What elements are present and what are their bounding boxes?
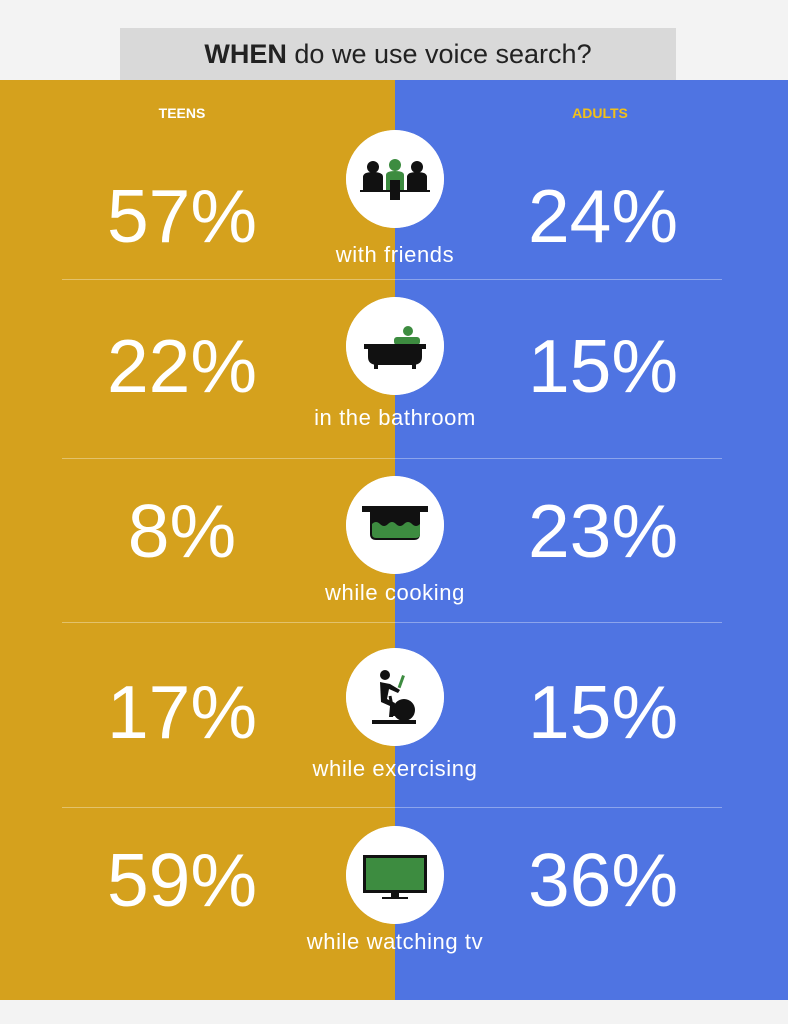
label: while exercising xyxy=(313,756,477,781)
teens value: 17% xyxy=(107,670,257,754)
adults value: 15% xyxy=(528,670,678,754)
row: in the bathroom xyxy=(107,297,678,430)
panel: teens xyxy=(0,80,395,1000)
icon: bathtub xyxy=(346,297,444,395)
icon: exercise bike xyxy=(346,648,444,746)
row: with friends xyxy=(107,130,678,267)
adults value: 36% xyxy=(528,838,678,922)
title xyxy=(120,28,676,80)
row: while cooking xyxy=(128,476,678,605)
label: while cooking xyxy=(325,580,465,605)
adults value: 23% xyxy=(528,489,678,573)
adults value: 24% xyxy=(528,174,678,258)
icon: pot xyxy=(346,476,444,574)
teens value: 8% xyxy=(128,489,236,573)
row: while exercising xyxy=(107,648,678,781)
icon: tv xyxy=(346,826,444,924)
label: in the bathroom xyxy=(314,405,476,430)
icon: friends xyxy=(346,130,444,228)
teens value: 22% xyxy=(107,324,257,408)
heading: adults: ADULTS xyxy=(572,105,628,121)
adults value: 15% xyxy=(528,324,678,408)
teens value: 57% xyxy=(107,174,257,258)
label: with friends xyxy=(336,242,454,267)
label: while watching tv xyxy=(307,929,483,954)
teens value: 59% xyxy=(107,838,257,922)
panel: adults xyxy=(395,80,788,1000)
title: WHEN do we use voice search? xyxy=(204,39,592,69)
row: while watching tv xyxy=(107,826,678,954)
heading: teens: TEENS xyxy=(159,105,205,121)
